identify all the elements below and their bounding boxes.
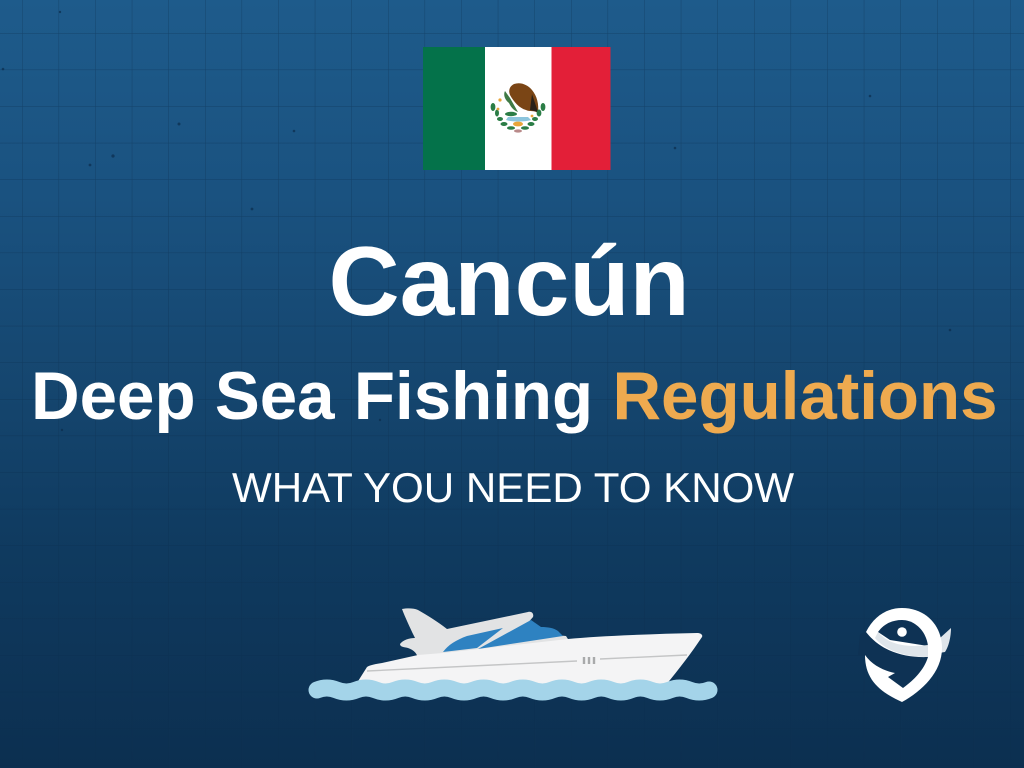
logo band [875,632,928,657]
boat hull [355,633,702,686]
icon: coat of arms [491,83,545,133]
logo eye [897,627,907,637]
tagline: WHAT YOU NEED TO KNOW [232,464,794,511]
logo: fish hook [858,608,951,702]
waves [317,688,709,692]
hull vents [584,657,594,664]
title: Cancún [328,226,690,336]
boat illustration [317,608,709,692]
boat cabin and fin [400,608,575,660]
flag of Mexico [423,47,610,170]
subtitle: Deep Sea Fishing Regulations [31,359,998,434]
logo gaps [858,632,928,688]
cabin windows [443,620,563,652]
